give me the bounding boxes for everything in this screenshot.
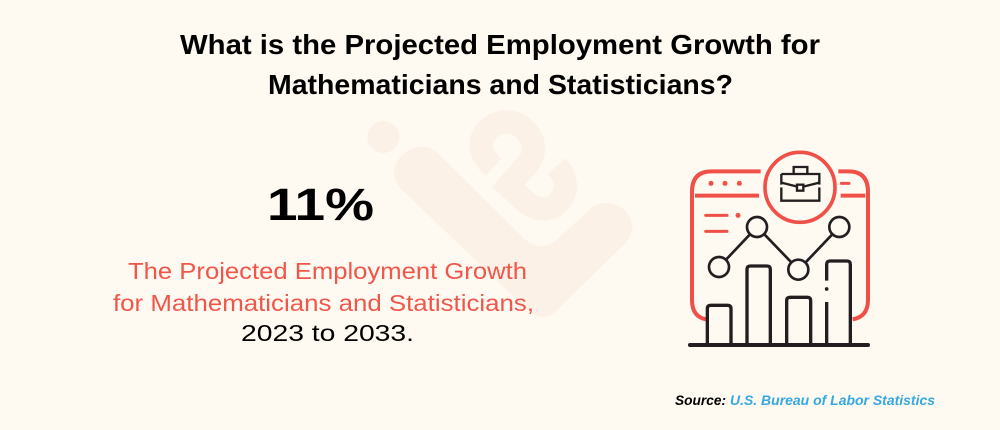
description text: The Projected Employment Growth xyxy=(128,258,527,284)
description text xyxy=(113,258,534,346)
description text: 2023 to 2033. xyxy=(241,320,414,346)
window frame xyxy=(692,171,868,319)
background watermark logo xyxy=(367,121,632,317)
title xyxy=(180,29,820,100)
source line: Source: xyxy=(675,392,726,408)
line chart xyxy=(709,217,849,280)
big statistic: 11% xyxy=(267,179,374,230)
title: What is the Projected Employment Growth for xyxy=(180,29,820,60)
icon: analytics dashboard with briefcase xyxy=(690,152,868,345)
briefcase badge xyxy=(765,152,835,222)
window dots xyxy=(708,181,742,218)
description text: for Mathematicians and Statisticians, xyxy=(113,290,534,316)
title: Mathematicians and Statisticians? xyxy=(268,69,733,100)
source line: U.S. Bureau of Labor Statistics xyxy=(730,392,935,408)
bar chart xyxy=(690,261,868,345)
